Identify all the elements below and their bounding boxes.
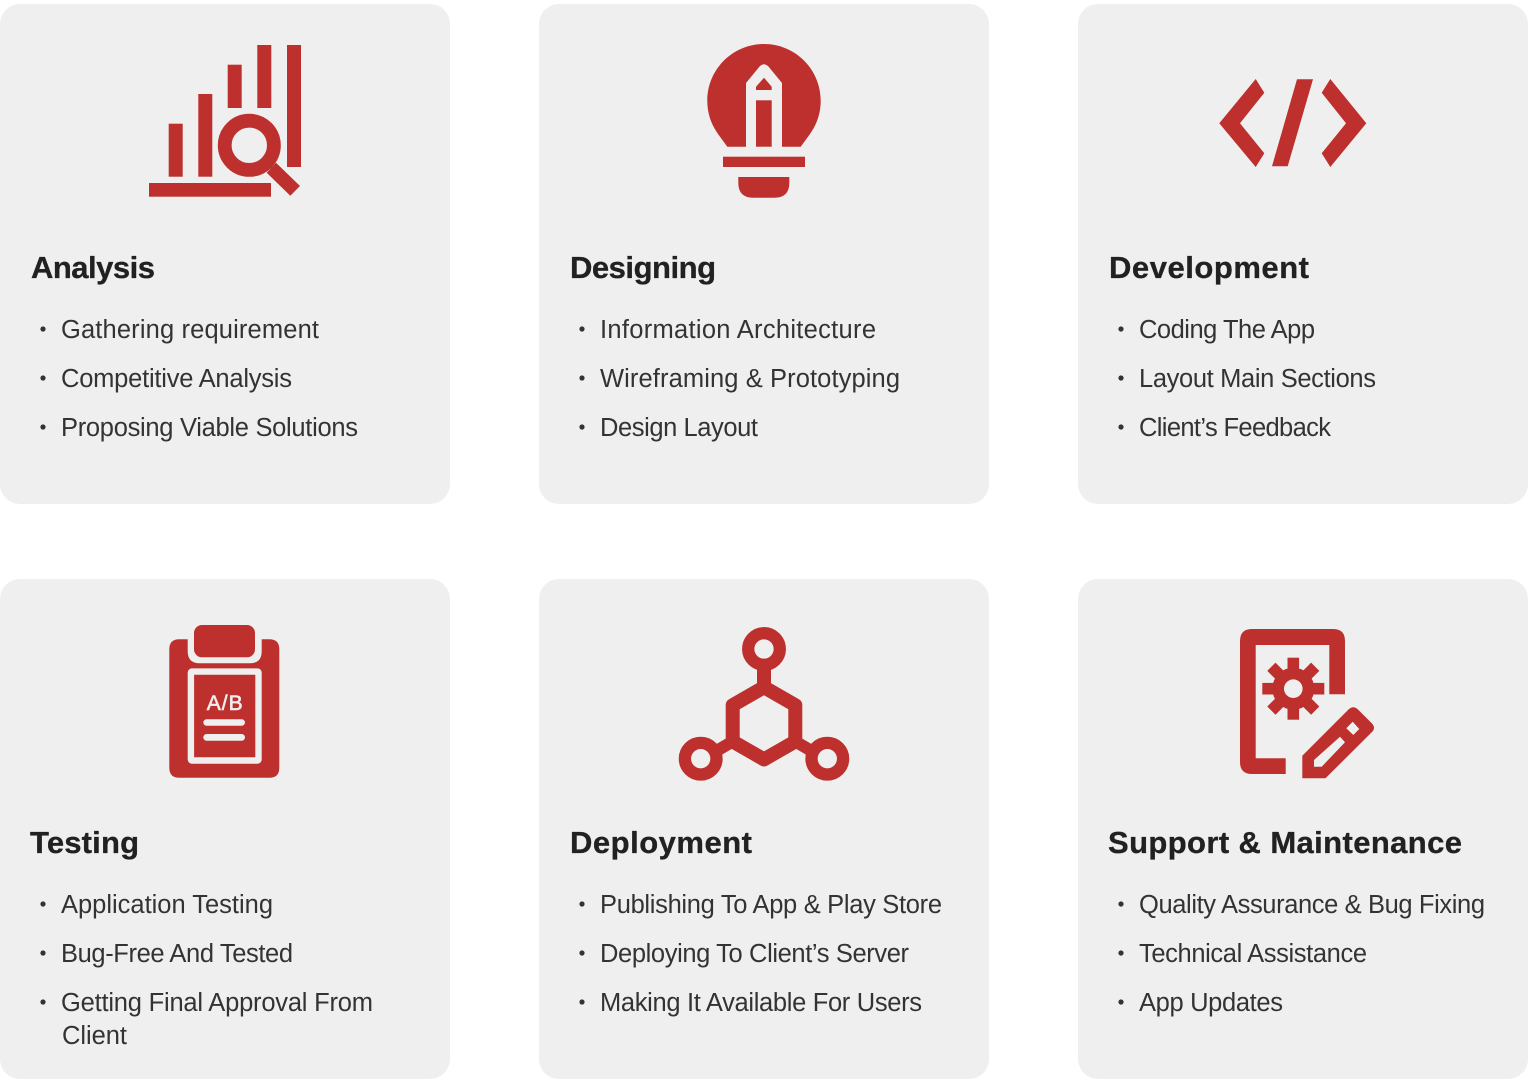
bullet list: testing: Client	[62, 1022, 127, 1050]
development card background	[1078, 4, 1528, 504]
bullet list: analysis: Gathering requirement	[61, 316, 319, 344]
bullet list: designing: Wireframing & Prototyping	[600, 365, 900, 393]
heading: Testing: Testing	[30, 825, 139, 860]
support card background	[1078, 579, 1528, 1079]
bullet list: testing: Bug-Free And Tested	[61, 940, 293, 968]
icon: A/B test clipboard	[169, 625, 279, 778]
heading: Analysis: Analysis	[31, 250, 155, 285]
icon: light bulb with pencil	[707, 44, 821, 198]
analysis card background	[0, 4, 450, 504]
bullet list: deployment: Making It Available For Users	[600, 989, 922, 1017]
bullet list: designing: Design Layout	[600, 414, 758, 442]
bullet list: development	[1118, 316, 1376, 442]
icon: A/B test clipboard: A/B	[207, 692, 243, 715]
bullet list: support	[1118, 891, 1485, 1017]
bullet list: testing: Application Testing	[61, 891, 273, 919]
bullet list: testing: Getting Final Approval From	[61, 989, 373, 1017]
bullet list: deployment: Publishing To App & Play Store	[600, 891, 942, 919]
icon: code brackets	[1219, 79, 1366, 167]
panel: support and maintenance	[1078, 579, 1528, 1079]
icon: device with gear and pencil	[1240, 629, 1374, 778]
testing card background	[0, 579, 450, 1079]
panel: testing	[0, 579, 450, 1079]
bullet list: testing	[40, 891, 373, 1050]
panel: analysis	[0, 4, 450, 504]
panel: designing	[539, 4, 989, 504]
bullet list: analysis	[40, 316, 358, 442]
panel: deployment	[539, 579, 989, 1079]
bullet list: analysis: Competitive Analysis	[61, 365, 292, 393]
designing card background	[539, 4, 989, 504]
deployment card background	[539, 579, 989, 1079]
bullet list: designing: Information Architecture	[600, 316, 876, 344]
heading: Deployment: Deployment	[570, 825, 752, 860]
bullet list: deployment: Deploying To Client’s Server	[600, 940, 910, 968]
heading: Designing: Designing	[570, 250, 716, 285]
bullet list: support: Technical Assistance	[1139, 940, 1367, 968]
icon: hexagon network	[685, 633, 843, 774]
bullet list: development: Client’s Feedback	[1139, 414, 1331, 442]
heading: Development: Development	[1109, 250, 1309, 285]
icon: bar chart with magnifier	[149, 45, 301, 197]
bullet list: analysis: Proposing Viable Solutions	[61, 414, 358, 442]
panel: development	[1078, 4, 1528, 504]
heading: Support & Maintenance: Support & Maintenance	[1108, 825, 1462, 860]
bullet list: development: Layout Main Sections	[1139, 365, 1376, 393]
bullet list: deployment	[579, 891, 942, 1017]
bullet list: support: Quality Assurance & Bug Fixing	[1139, 891, 1485, 919]
bullet list: support: App Updates	[1139, 989, 1283, 1017]
bullet list: development: Coding The App	[1139, 316, 1315, 344]
bullet list: designing	[579, 316, 900, 442]
